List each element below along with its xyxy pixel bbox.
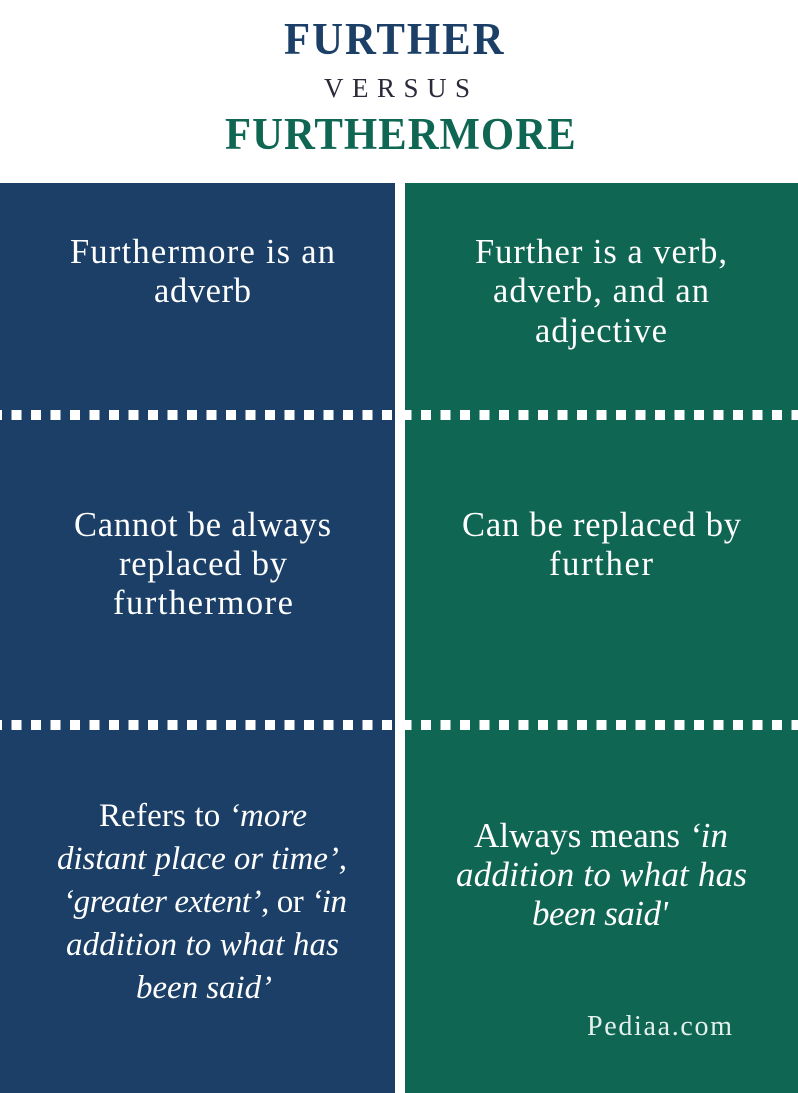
text: replacement, further column (74, 506, 331, 622)
text: replacement, furthermore column: further (549, 545, 654, 583)
text: meaning, further column (57, 798, 347, 1006)
text: replacement, further column: furthermore (113, 584, 293, 622)
text: part of speech, furthermore column: adjective (535, 312, 667, 350)
text: part of speech, furthermore column: Further is a verb, (475, 233, 727, 271)
text: meaning, further column: ‘greater extent’, or ‘in (63, 884, 347, 920)
text: replacement, further column: Cannot be always (74, 506, 331, 544)
text: meaning, furthermore column: Always means ‘in (474, 816, 728, 855)
panel: further column (0, 183, 395, 1093)
text: meaning, further column: Refers to ‘more (99, 798, 307, 834)
title: further: FURTHER (284, 13, 504, 64)
title: versus: VERSUS (324, 73, 470, 103)
text: part of speech, further column: adverb (154, 272, 251, 310)
text: meaning, furthermore column (456, 816, 747, 933)
panel: furthermore column (405, 183, 798, 1093)
title: furthermore: FURTHERMORE (225, 108, 576, 159)
text: meaning, furthermore column: been said' (532, 894, 668, 933)
text: part of speech, further column: Furthermore is an (70, 233, 335, 271)
text: replacement, furthermore column (462, 506, 742, 583)
text: meaning, further column: addition to what has (66, 927, 339, 963)
text: meaning, furthermore column: addition to what has (456, 855, 747, 894)
text: meaning, further column: distant place or time’, (57, 841, 347, 877)
title (225, 13, 576, 159)
text: part of speech, furthermore column: adverb, and an (493, 272, 709, 310)
logo: Pediaa.com: Pediaa.com (587, 1011, 732, 1042)
text: meaning, further column: been said’ (136, 970, 272, 1006)
text: replacement, further column: replaced by (119, 545, 288, 583)
text: replacement, furthermore column: Can be replaced by (462, 506, 742, 544)
text: part of speech, further column (70, 233, 335, 310)
text: part of speech, furthermore column (475, 233, 727, 350)
